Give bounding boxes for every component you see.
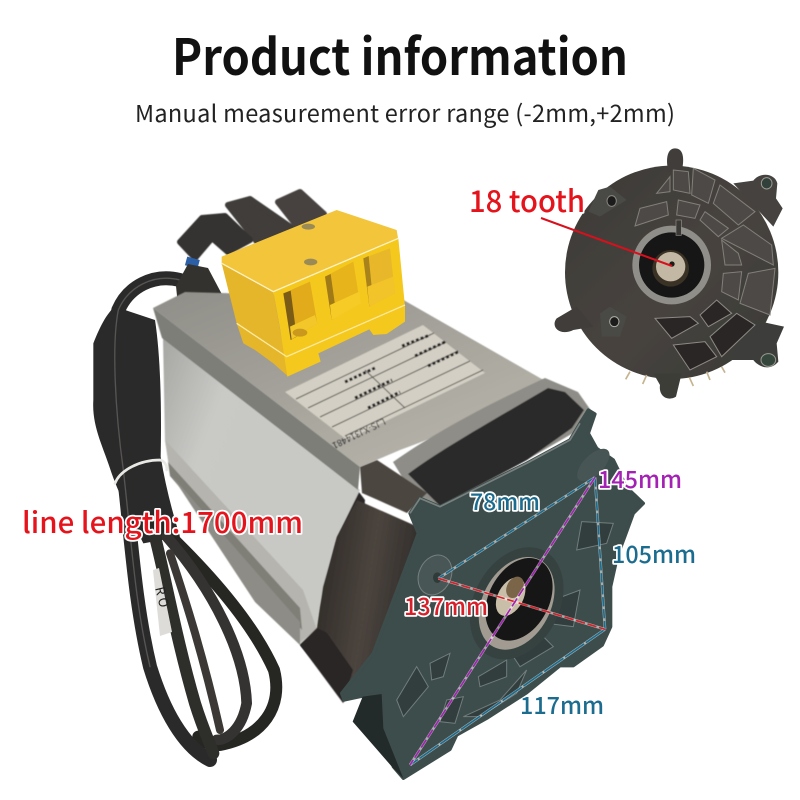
ribbed windows [397,522,613,723]
137mm line [438,578,605,629]
pins [626,367,725,386]
upper right mounting hole [761,178,772,189]
pinion [652,250,689,287]
upper mount boss [572,443,615,487]
hub ring [632,226,711,304]
thick power leads behind terminal block [180,192,324,258]
front-left edge strip [153,308,360,490]
rating label plate [285,325,485,452]
dimension label 78mm: 78mm [470,483,540,517]
lower foot of cylinder [300,628,353,703]
plate outline [342,410,643,778]
subtitle: measurement error range: Manual measurement error range (-2mm,+2mm) [135,95,675,129]
callout: 18 tooth: 18 tooth [469,177,585,221]
117mm line [410,629,605,765]
dimension label 137mm: 137mm [404,587,488,622]
rating label plate: LJS-XJ314481 [330,415,388,452]
silver rim [393,378,592,510]
backing behind housing joint [300,480,365,700]
upper bundled cable mass [93,307,180,543]
lower left mounting hole [610,317,619,327]
side face: silver housing [163,338,360,645]
dimension label 105mm: 105mm [612,535,696,570]
shaft bore [451,531,582,676]
cable marker sticker: R O [151,584,175,609]
top face [153,292,575,467]
pinion gear [490,572,532,621]
sensor connector [176,257,226,316]
yellow terminal block [222,210,405,377]
motor end plate [342,410,643,778]
ribbed windows [635,168,775,315]
78mm line [438,477,595,578]
keyway slot [676,220,681,235]
corner lug [360,460,427,513]
dimension label 117mm: 117mm [520,686,604,721]
mounting foot [353,694,403,778]
cable marker sticker [151,568,175,636]
callout leader: 18 tooth [541,218,672,266]
callout: line length: line length:1700mm [22,500,303,542]
upper left mounting hole [607,196,616,206]
rear housing: end cylinder, rim and opening [300,378,592,703]
left mount boss [412,550,458,600]
dark opening [408,388,584,506]
lower rail [172,476,300,645]
title: Product information [172,18,628,90]
105mm line [595,477,605,629]
side groove shading [165,440,317,642]
motor body [153,292,575,700]
measurement lines [410,477,605,765]
dark end cylinder [317,500,425,703]
cable bundle [93,278,276,760]
end cap photo with 18 tooth pinion [555,148,784,399]
dimension label 145mm: 145mm [598,460,682,495]
end cap plate [555,148,784,399]
lower right mounting hole [761,354,776,366]
145mm line [410,477,595,765]
cable tie [115,460,167,483]
plate edge highlights [410,423,580,513]
